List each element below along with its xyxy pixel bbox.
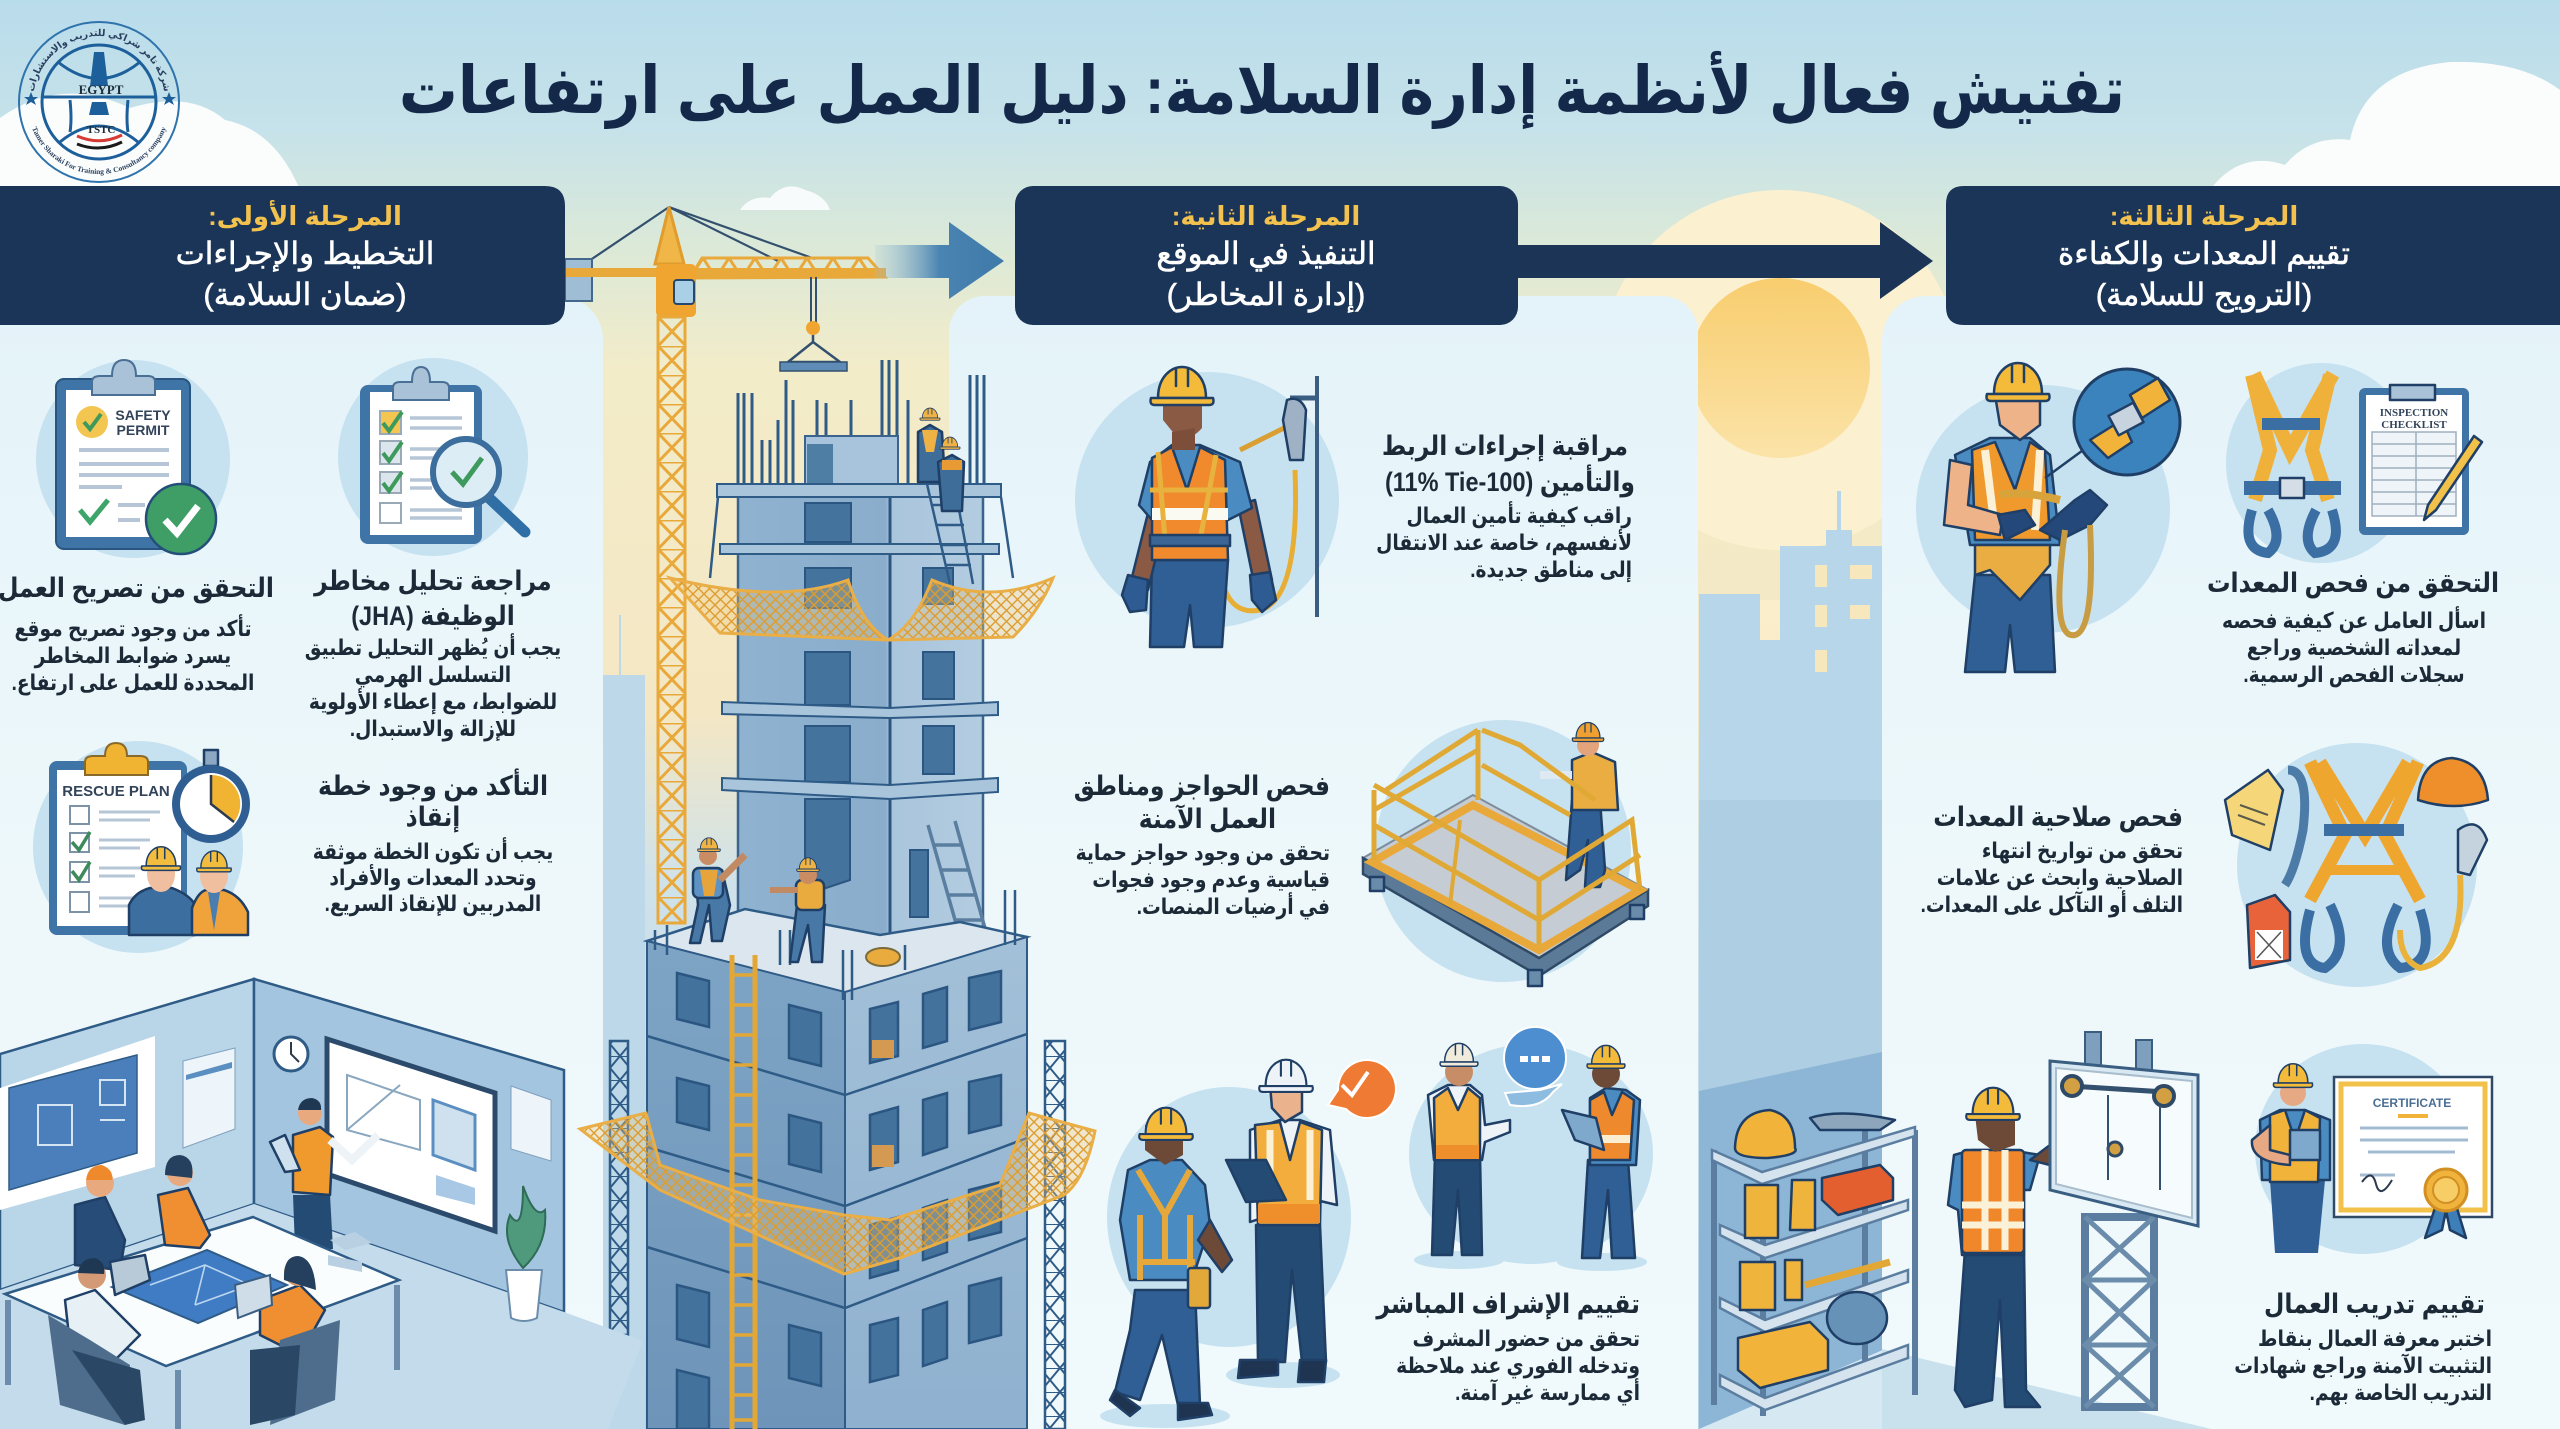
- distant building left: [603, 615, 645, 1429]
- heading: tie off: [1382, 432, 1635, 498]
- icon: worker and certificate: [2252, 1044, 2492, 1254]
- heading: tie off: مراقبة إجراءات الربط: [1382, 432, 1628, 462]
- heading: JHA: [312, 567, 552, 632]
- workers: windows: [872, 1040, 894, 1167]
- heading: rescue: إنقاذ: [406, 803, 460, 833]
- text: validity body: [1921, 840, 2183, 917]
- heading: tie off: والتأمين (‪11% Tie-100‬): [1385, 464, 1635, 498]
- icon: safety permit clipboard: [36, 360, 230, 558]
- heading: guardrails: فحص الحواجز ومناطق: [1074, 772, 1330, 802]
- logo: Tamer Sharaki For Training & Consultancy company: [32, 126, 166, 176]
- ladder: grey roof: [928, 821, 988, 948]
- text: rescue body: المدربين للإنقاذ السريع.: [325, 893, 541, 916]
- seated people: [48, 1155, 340, 1425]
- floor: phase three: [1882, 1349, 2211, 1429]
- header bar: phase three: (الترويج للسلامة): [2096, 277, 2312, 313]
- icon: harness and log: CHECKLIST: [2381, 419, 2447, 431]
- illustration: anchor board and truss: [2050, 1032, 2198, 1407]
- panel: phase three background: [1882, 296, 2560, 1429]
- logo: شركة تامر شراكي للتدريب والاستشارات: [29, 28, 169, 91]
- net: lower safety net: [580, 1113, 1095, 1274]
- header bar: phase three: [1946, 186, 2560, 325]
- worker at anchor board: [1948, 1088, 2092, 1407]
- header bar: phase three: المرحلة الثالثة:: [2110, 201, 2298, 232]
- text: inspection body: اسأل العامل عن كيفية فحصه: [2222, 605, 2486, 633]
- heading: JHA: مراجعة تحليل مخاطر: [312, 567, 552, 597]
- heading: supervision: تقييم الإشراف المباشر: [1375, 1290, 1640, 1320]
- crane: [565, 207, 886, 923]
- text: JHA body: التسلسل الهرمي: [355, 664, 511, 687]
- workers: on roof: [690, 838, 900, 966]
- logo: TSTC: [87, 124, 115, 136]
- header bar: phase three: تقييم المعدات والكفاءة: [2058, 236, 2350, 272]
- header bar: phase one: (ضمان السلامة): [203, 277, 407, 312]
- text: JHA body: للإزالة والاستبدال.: [350, 718, 516, 741]
- net: upper safety net: [670, 578, 1053, 640]
- panel: phase one background: [0, 296, 603, 1429]
- text: training body: التدريب الخاصة بهم.: [2310, 1382, 2492, 1405]
- heading: JHA: الوظيفة (JHA): [351, 602, 515, 632]
- text: training body: التثبيت الآمنة وراجع شهادات: [2234, 1353, 2492, 1378]
- text: tie off body: لأنفسهم، خاصة عند الانتقال: [1376, 527, 1632, 555]
- workers: upper pair: [918, 408, 964, 511]
- logo: [18, 21, 180, 183]
- text: supervision body: وتدخله الفوري عند ملاحظة: [1396, 1355, 1640, 1379]
- header bar: phase two: المرحلة الثانية:: [1172, 201, 1360, 232]
- text: JHA body: يجب أن يُظهر التحليل تطبيق: [305, 632, 561, 660]
- arrow: phase one to two: [875, 222, 1004, 299]
- scaffold towers: [610, 1041, 1065, 1429]
- text: rescue body: [313, 836, 553, 916]
- text: permit body: [12, 613, 254, 695]
- title: تفتيش فعال لأنظمة إدارة السلامة: دليل العمل على ارتفاعات: [399, 51, 2125, 129]
- text: rescue body: يجب أن تكون الخطة موثقة: [313, 836, 553, 864]
- text: JHA body: للضوابط، مع إعطاء الأولوية: [309, 686, 557, 714]
- header bar: phase two: (إدارة المخاطر): [1167, 277, 1365, 313]
- heading: rescue: [318, 768, 548, 833]
- illustration: planning office: [0, 979, 643, 1429]
- logo: EGYPT: [79, 82, 124, 97]
- icon: harness and log: [2226, 363, 2482, 563]
- header bar: phase one: المرحلة الأولى:: [208, 200, 402, 232]
- heading: inspection: التحقق من فحص المعدات: [2207, 569, 2499, 599]
- text: permit body: تأكد من وجود تصريح موقع: [14, 613, 252, 641]
- illustration: equipment shelf: [1712, 1110, 1915, 1416]
- icon: safety permit clipboard: PERMIT: [117, 422, 170, 438]
- header bar: phase one: التخطيط والإجراءات: [176, 236, 434, 272]
- text: validity body: التلف أو التآكل على المعدات.: [1921, 889, 2183, 917]
- text: inspection body: لمعداته الشخصية وراجع: [2247, 637, 2461, 660]
- header bar: phase one: [0, 186, 565, 325]
- heading: guardrails: العمل الآمنة: [1139, 803, 1276, 834]
- header bar: phase two: [1015, 186, 1518, 325]
- text: supervision body: [1396, 1328, 1640, 1406]
- icon: worker and supervisor: [1100, 1060, 1396, 1428]
- text: inspection body: [2222, 605, 2486, 687]
- icon: rescue plan: [33, 741, 250, 953]
- icon: safety permit clipboard: SAFETY: [115, 407, 171, 423]
- text: tie off body: راقب كيفية تأمين العمال: [1407, 500, 1632, 528]
- icon: supervisor conversation: [1409, 1027, 1653, 1271]
- text: training body: اختبر معرفة العمال بنقاط: [2258, 1328, 2492, 1351]
- icon: JHA clipboard and magnifier: [338, 358, 528, 556]
- icon: harness and log: INSPECTION: [2380, 407, 2448, 419]
- text: tie off body: إلى مناطق جديدة.: [1470, 559, 1632, 582]
- text: guardrails body: في أرضيات المنصات.: [1137, 891, 1330, 919]
- presenter: [270, 1098, 378, 1249]
- building: lower block: [610, 838, 1065, 1429]
- plant: [506, 1186, 545, 1321]
- icon: worker inspecting harness: [1916, 363, 2180, 672]
- heading: guardrails: [1074, 772, 1330, 834]
- icon: worker and certificate: CERTIFICATE: [2373, 1096, 2451, 1110]
- text: validity body: تحقق من تواريخ انتهاء: [1982, 840, 2183, 863]
- panel: phase two background: [949, 296, 1698, 1429]
- building: upper tower: [710, 360, 1013, 948]
- text: training body: [2234, 1328, 2492, 1405]
- icon: worker tied off: [1075, 367, 1339, 647]
- icon: rescue plan: RESCUE PLAN: [62, 783, 170, 800]
- text: permit body: يسرد ضوابط المخاطر: [34, 645, 231, 668]
- text: guardrails body: [1076, 842, 1330, 919]
- text: permit body: المحددة للعمل على ارتفاع.: [12, 672, 254, 695]
- text: supervision body: تحقق من حضور المشرف: [1413, 1328, 1640, 1351]
- text: validity body: الصلاحية وابحث عن علامات: [1937, 867, 2183, 890]
- text: inspection body: سجلات الفحص الرسمية.: [2243, 664, 2465, 687]
- text: supervision body: أي ممارسة غير آمنة.: [1455, 1377, 1640, 1406]
- text: rescue body: وتحدد المعدات والأفراد: [329, 862, 537, 890]
- meeting table: [5, 1217, 399, 1429]
- ladder: grey top: [927, 484, 973, 584]
- heading: training: تقييم تدريب العمال: [2264, 1290, 2485, 1319]
- heading: rescue: التأكد من وجود خطة: [318, 768, 548, 802]
- ladder: orange: [732, 955, 755, 1429]
- text: tie off body: [1376, 500, 1632, 582]
- heading: permit: التحقق من تصريح العمل: [0, 574, 274, 604]
- header bar: phase two: التنفيذ في الموقع: [1156, 236, 1376, 272]
- text: guardrails body: تحقق من وجود حواجز حماية: [1076, 842, 1330, 865]
- icon: guarded platform: [1363, 720, 1648, 986]
- text: JHA body: [305, 632, 561, 741]
- arrow: phase two to three: [1518, 222, 1933, 299]
- icon: worn harness and tags: [2225, 743, 2488, 987]
- text: guardrails body: قياسية وعدم وجود فجوات: [1092, 869, 1330, 892]
- heading: validity: فحص صلاحية المعدات: [1933, 803, 2183, 833]
